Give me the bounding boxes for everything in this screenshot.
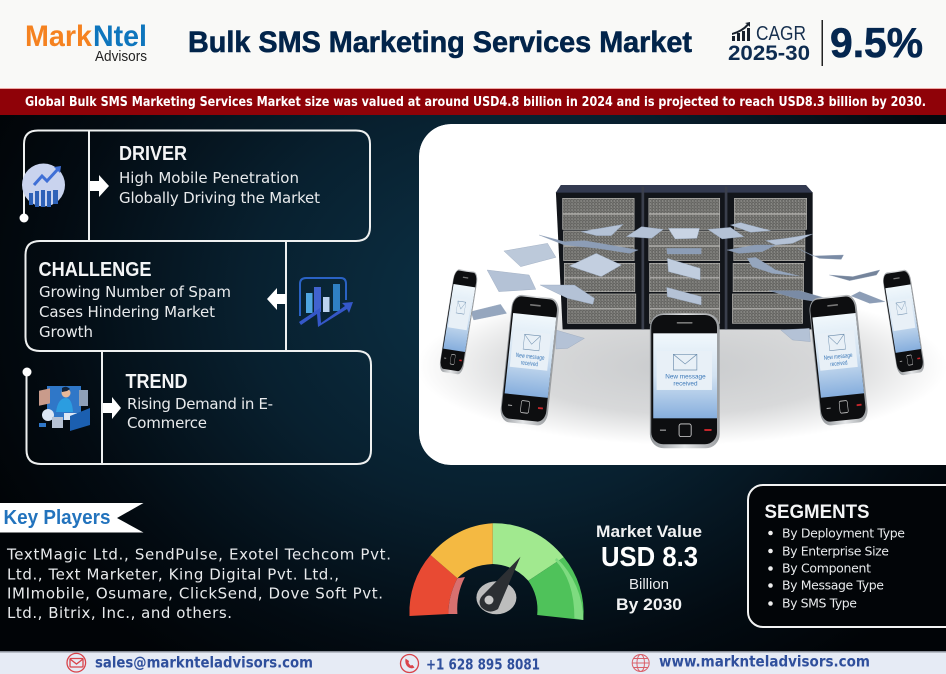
- icon: phone: [400, 654, 418, 672]
- key players list: [6, 546, 391, 622]
- icon: email: [67, 653, 86, 672]
- phone: near right: received: [830, 360, 848, 369]
- segments list: By Deployment Type: [782, 526, 905, 540]
- gauge light green sector: [493, 523, 564, 581]
- phone: center: New message: [665, 374, 706, 381]
- market value text: [596, 523, 702, 614]
- panel: hero illustration: [417, 124, 946, 465]
- trend text: [126, 371, 273, 432]
- phone: far left: [438, 269, 479, 375]
- key players list: Ltd., Bitrix, Inc., and others.: [7, 604, 232, 622]
- key players heading: Key Players: [4, 507, 110, 529]
- gauge needle: [476, 557, 520, 614]
- floor shadow: [439, 304, 924, 438]
- market value text: Market Value: [596, 523, 702, 541]
- icon: trend analyst: [39, 386, 90, 431]
- logo: [25, 20, 147, 65]
- segments list: By Enterprise Size: [782, 544, 889, 558]
- segments list: By Message Type: [782, 578, 884, 593]
- driver text: High Mobile Penetration: [119, 169, 299, 187]
- arrow: driver: [90, 175, 109, 197]
- key players list: TextMagic Ltd., SendPulse, Exotel Techcom Pvt.: [6, 546, 391, 564]
- challenge text: Growth: [39, 323, 93, 341]
- panel outline: [24, 130, 371, 464]
- challenge text: [38, 259, 231, 341]
- gauge green sector: [528, 557, 584, 620]
- chart: market value gauge: [409, 523, 584, 620]
- header band: [0, 0, 946, 88]
- icon: challenge bar chart: [299, 278, 353, 327]
- key players list: IMImobile, Osumare, ClickSend, Dove Soft Pvt.: [7, 584, 383, 602]
- gauge yellow sector: [430, 523, 493, 578]
- challenge text: Growing Number of Spam: [39, 283, 231, 301]
- trend text: Rising Demand in E-: [127, 395, 273, 413]
- arrow: trend: [103, 397, 121, 419]
- phone: center: [650, 313, 720, 448]
- trend text: Commerce: [127, 414, 207, 432]
- phone: center: received: [673, 381, 698, 388]
- market value text: USD 8.3: [601, 541, 698, 572]
- CAGR label: 2025-30: [728, 41, 810, 65]
- phone: near left: New message: [515, 352, 545, 362]
- challenge text: Cases Hindering Market: [39, 303, 215, 321]
- key players ribbon: [0, 503, 144, 532]
- server racks: [556, 185, 813, 329]
- segments list: By SMS Type: [782, 596, 857, 611]
- email address: sales@marknteladvisors.com: [95, 654, 313, 672]
- panel: driver challenge trend flow: [20, 130, 371, 464]
- flying envelopes: [471, 223, 885, 349]
- segments list: By Component: [782, 561, 871, 576]
- market value text: Billion: [629, 577, 669, 593]
- phone: near right: [808, 294, 869, 426]
- challenge text: CHALLENGE: [38, 259, 152, 281]
- segments heading: SEGMENTS: [764, 501, 870, 523]
- logo: Advisors: [95, 49, 147, 65]
- icon: globe: [632, 654, 649, 672]
- driver text: DRIVER: [119, 143, 187, 165]
- phone: near right: New message: [824, 352, 853, 362]
- segments list: [768, 526, 905, 611]
- logo: Mark: [25, 20, 93, 53]
- website: www.marknteladvisors.com: [659, 653, 870, 671]
- driver text: Globally Driving the Market: [119, 189, 320, 207]
- phone: far right: [882, 269, 926, 376]
- gauge red sector: [409, 555, 457, 616]
- icon: driver people and growth: [22, 164, 65, 207]
- summary banner: [0, 88, 946, 115]
- icon: growth chart: [732, 22, 750, 41]
- phone number: +1 628 895 8081: [426, 656, 540, 674]
- CAGR label: CAGR: [756, 23, 806, 45]
- CAGR value: 9.5%: [830, 19, 923, 66]
- market value text: By 2030: [616, 595, 682, 614]
- trend text: TREND: [126, 371, 188, 393]
- CAGR label: [728, 22, 810, 65]
- title: Bulk SMS Marketing Services Market: [188, 26, 692, 59]
- phone: near left: [499, 294, 560, 426]
- footer band: [0, 651, 946, 674]
- key players list: Ltd., Text Marketer, King Digital Pvt. Ltd.,: [7, 566, 339, 584]
- phone: near left: received: [520, 360, 538, 369]
- arrow: challenge: [267, 288, 286, 310]
- panel: key players: [0, 503, 391, 622]
- panel: segments: [748, 485, 946, 627]
- logo: Ntel: [93, 20, 147, 53]
- driver text: [119, 143, 320, 207]
